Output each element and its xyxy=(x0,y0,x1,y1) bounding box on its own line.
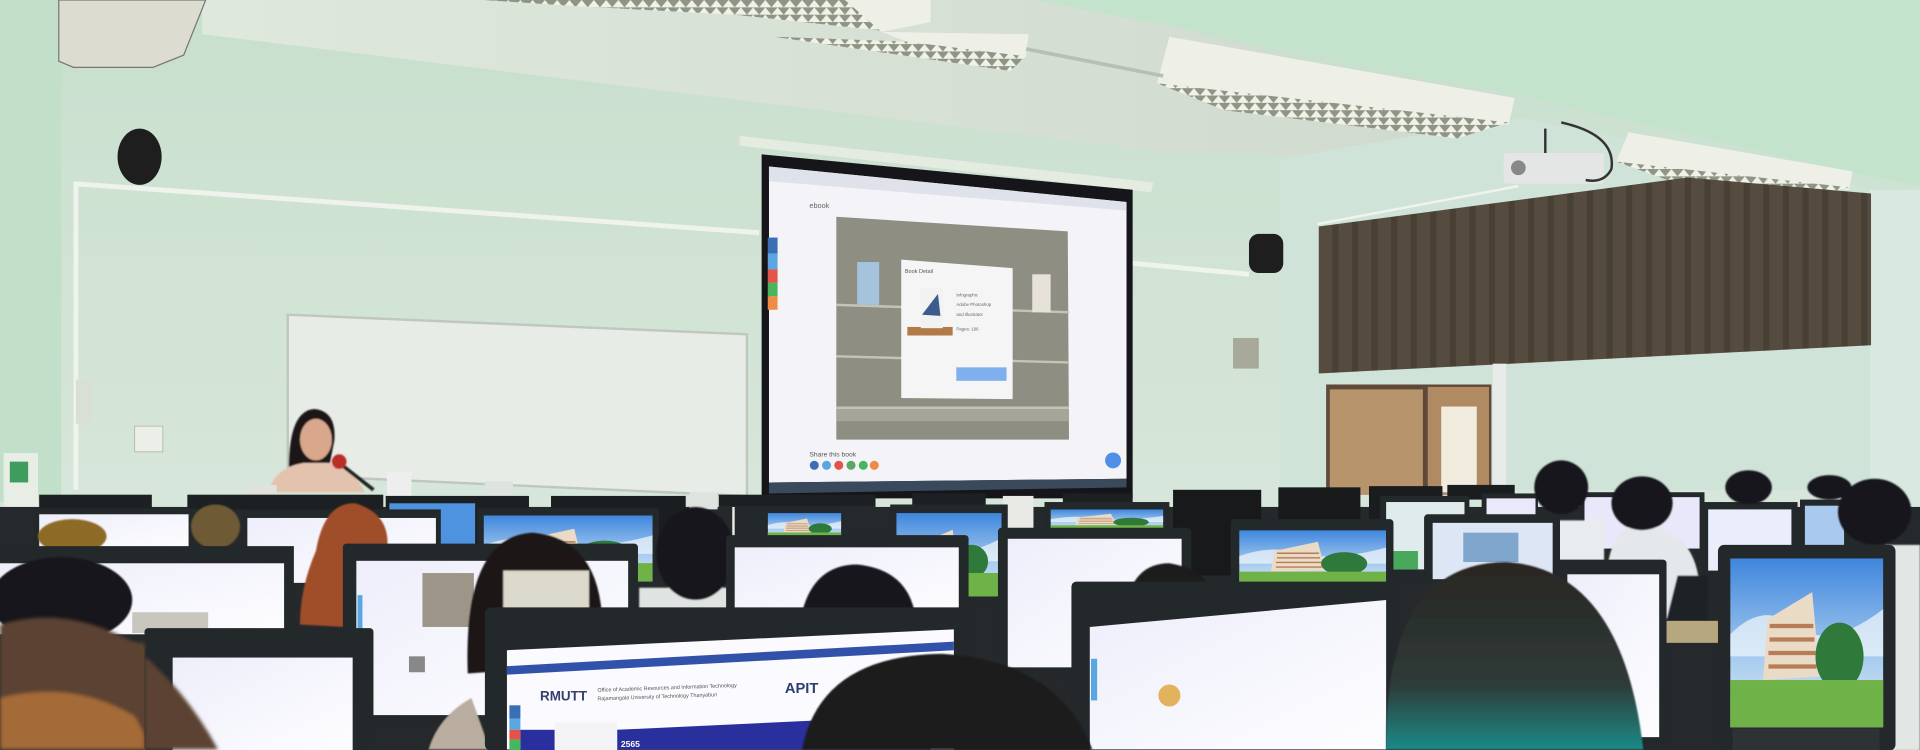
ceiling xyxy=(202,0,1518,157)
front student hair xyxy=(0,618,218,749)
front left hair overlap xyxy=(129,643,218,749)
right pillar xyxy=(1870,190,1920,508)
dropdown menu xyxy=(555,722,617,750)
side share buttons xyxy=(509,705,520,750)
apit logo: APIT xyxy=(785,681,818,697)
social share bar xyxy=(768,238,778,310)
left blue block xyxy=(520,730,555,750)
curtain rail xyxy=(1318,186,1518,224)
second monitor row xyxy=(34,492,1849,602)
microphone xyxy=(334,459,373,490)
ceiling lights xyxy=(484,0,1853,200)
projector xyxy=(1504,122,1612,184)
book detail dialog: and Illustrator xyxy=(956,312,983,317)
left pillar xyxy=(0,0,61,502)
book thumbnail xyxy=(1158,684,1180,707)
desk papers xyxy=(246,471,1256,536)
student head behind monitor xyxy=(802,564,915,612)
student head xyxy=(467,533,602,673)
wall switch xyxy=(1233,338,1259,369)
front left monitor xyxy=(144,628,373,750)
control display xyxy=(10,462,28,482)
back chair xyxy=(1665,576,1708,624)
dark desk area behind monitors xyxy=(0,507,1920,750)
back monitor row xyxy=(39,485,1515,576)
wall outlet xyxy=(76,380,92,424)
book description: Infographic xyxy=(956,292,979,297)
university name: Rajamangala University of Technology Thanyaburi xyxy=(597,692,717,702)
front center monitor xyxy=(485,607,975,750)
right side students xyxy=(1534,460,1920,750)
page banner xyxy=(617,715,931,749)
book detail dialog xyxy=(901,260,1013,399)
front right head with teal hair xyxy=(1386,562,1643,749)
chat bubble xyxy=(1105,452,1121,468)
screen surface xyxy=(769,167,1127,482)
student head left xyxy=(0,557,132,643)
screen casing xyxy=(740,136,1153,192)
left speaker xyxy=(118,129,162,185)
share bar xyxy=(1091,659,1097,700)
browser tabs xyxy=(769,167,1127,211)
share icons xyxy=(810,461,879,470)
presenter hair xyxy=(289,409,335,471)
front right-center monitor xyxy=(1071,582,1400,750)
student head with mask xyxy=(1611,476,1673,530)
far student head xyxy=(1725,470,1772,504)
front student hair highlight xyxy=(0,692,153,749)
student paper xyxy=(503,571,589,627)
wall control panel xyxy=(4,453,38,514)
thermostat xyxy=(135,426,163,452)
ceiling conduit xyxy=(1026,49,1163,76)
students in front of third row xyxy=(0,533,1212,749)
side student head xyxy=(1838,479,1911,545)
bookshelf xyxy=(836,217,1069,440)
browser window xyxy=(507,629,954,749)
tall right monitor xyxy=(1555,560,1667,743)
office name: Office of Academic Resources and Information Technology xyxy=(597,683,737,694)
head behind monitor xyxy=(38,519,107,553)
side student shirt xyxy=(1886,545,1920,750)
curtain xyxy=(1319,178,1871,373)
student hair xyxy=(300,503,388,627)
screen frame xyxy=(762,154,1133,498)
presenter xyxy=(268,409,373,492)
projection screen xyxy=(740,136,1153,498)
upper right beam xyxy=(1035,0,1920,186)
microphone foam xyxy=(332,454,347,469)
blue header stripe xyxy=(507,642,954,675)
share caption: Share this book xyxy=(809,452,857,459)
front desk surface xyxy=(1665,621,1720,643)
third monitor row xyxy=(0,514,1560,722)
book cover xyxy=(907,327,953,336)
right wall upper band xyxy=(1280,118,1873,490)
head behind monitor xyxy=(191,504,240,549)
student back shirt xyxy=(639,588,727,624)
front left head xyxy=(0,618,218,749)
book detail dialog: Pages: 196 xyxy=(956,327,979,332)
student shirt xyxy=(1607,524,1700,618)
taskbar xyxy=(769,479,1127,493)
front center head xyxy=(802,654,1092,749)
student white shirt xyxy=(1558,520,1604,563)
student head xyxy=(1534,460,1588,514)
page label: ebook xyxy=(809,201,830,210)
whiteboard xyxy=(288,315,747,496)
far student head xyxy=(1807,475,1851,500)
site logo: RMUTT xyxy=(540,688,588,703)
middle students xyxy=(38,503,735,627)
banner year text: 2565 xyxy=(621,739,640,749)
front right monitor with campus wallpaper xyxy=(1718,545,1896,750)
student with mask shirt xyxy=(429,698,490,749)
page content on third row monitor xyxy=(358,595,425,672)
presenter face xyxy=(300,419,332,460)
student head behind monitor xyxy=(1129,563,1212,594)
air conditioner xyxy=(59,0,206,67)
wall frame rail xyxy=(73,184,1249,490)
book detail dialog: Book Detail xyxy=(905,269,933,275)
view button xyxy=(956,367,1007,381)
book detail dialog: Adobe Photoshop xyxy=(956,302,992,307)
door xyxy=(1326,364,1506,495)
student head xyxy=(656,507,735,600)
right speaker xyxy=(1249,234,1283,273)
presenter top xyxy=(268,463,365,492)
